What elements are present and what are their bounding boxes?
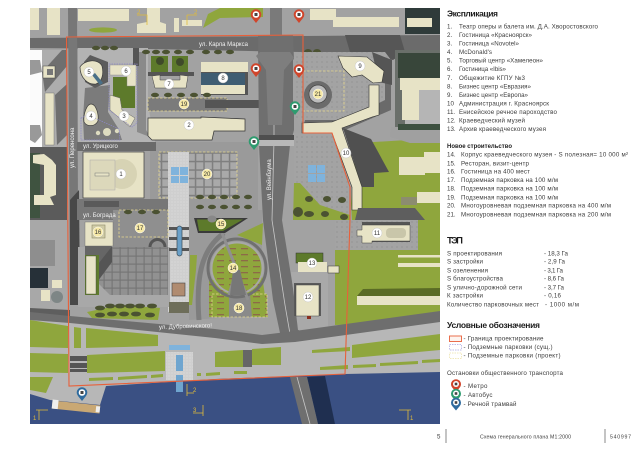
- number markers: 5: [87, 70, 91, 76]
- new construction list: 16.: [447, 169, 456, 176]
- indicator rows: - 0,16: [544, 293, 562, 300]
- number markers: 9: [358, 64, 362, 70]
- heading: symbols: Условные обозначения: [447, 320, 540, 330]
- buildings 6 and 3: [110, 65, 136, 127]
- section marks: 2: [137, 10, 141, 16]
- street labels: ул. Карла Маркса: [199, 42, 249, 48]
- number markers: 8: [221, 76, 225, 82]
- number markers: 16: [95, 230, 102, 236]
- pedestrian bridge: [259, 135, 296, 146]
- road centre lines: [272, 125, 290, 332]
- legend: explication: [447, 8, 599, 133]
- building 2: [148, 117, 245, 140]
- new construction list: Корпус краеведческого музея - S полезная= 10 000 м²: [461, 152, 628, 159]
- road Perensona: [68, 8, 78, 305]
- paved square south: [78, 247, 170, 307]
- building 4: [84, 104, 119, 136]
- new construction list: 18.: [447, 186, 456, 193]
- east gallery plaza: [293, 133, 352, 220]
- block 20 square: [158, 152, 238, 312]
- explication list: 10: [447, 100, 454, 107]
- explication list: 12.: [447, 117, 456, 124]
- SW block satellite: [30, 220, 70, 322]
- indicator rows: S проектирования: [447, 250, 502, 257]
- heading: public transport stops: Остановки общественного транспорта: [447, 370, 564, 377]
- shadow of building 10: [343, 128, 389, 187]
- indicator rows: - 18,3 Га: [544, 250, 569, 257]
- street labels: ул. Бограда: [83, 213, 116, 219]
- road Veinbauma: [258, 36, 299, 333]
- section marks: [33, 10, 414, 422]
- table: technical and economic indicators: [447, 236, 579, 308]
- number markers: 13: [309, 261, 316, 267]
- heading: explication: Экспликация: [447, 8, 498, 18]
- bus stop icons: [249, 101, 300, 150]
- number markers: 7: [167, 82, 171, 88]
- parking 17: [113, 210, 168, 247]
- new construction list: Подземная парковка на 100 м/м: [461, 177, 558, 184]
- new construction list: 17.: [447, 177, 456, 184]
- indicator rows: Количество парковочных мест: [447, 301, 539, 308]
- explication list: 9.: [447, 92, 452, 99]
- number markers: 15: [218, 222, 225, 228]
- new construction list: Ресторан, визит-центр: [461, 160, 530, 167]
- river tram stop icon: [77, 387, 87, 401]
- number markers: 18: [236, 306, 243, 312]
- rows of trees: [92, 46, 321, 214]
- section marks: 3: [193, 408, 197, 414]
- number markers: 3: [122, 114, 126, 120]
- explication list: Театр оперы и балета им. Д.А. Хворостовского: [459, 24, 599, 31]
- symbol: design boundary: - Граница проектирование: [464, 336, 544, 342]
- road Karl Marx: [30, 35, 440, 52]
- street labels: [70, 42, 273, 331]
- street labels: ул. Урицкого: [83, 144, 118, 150]
- lawn buildings east: [357, 255, 440, 305]
- boundary of design area: [66, 35, 350, 386]
- explication list: Гостиница «Ibis»: [459, 66, 507, 73]
- new construction list: Многоуровневая подземная парковка на 200 м/м: [461, 212, 611, 219]
- parking 21: [303, 71, 344, 111]
- explication list: Бизнес центр «Евразия»: [459, 83, 532, 90]
- legend: new construction: [447, 144, 628, 219]
- indicator rows: - 3,7 Га: [544, 284, 565, 291]
- indicator rows: - 1000 м/м: [545, 301, 579, 308]
- explication list: 4.: [447, 49, 452, 56]
- legend: symbols: [447, 320, 564, 410]
- river steps and pools: [166, 345, 193, 380]
- street labels: ул. Дубровинского!: [159, 323, 212, 331]
- east quarter buildings: [355, 152, 440, 220]
- indicator rows: К застройки: [447, 293, 484, 300]
- indicator rows: S застройки: [447, 259, 484, 266]
- pier pool: [176, 375, 183, 392]
- parking outline 6-3: [109, 64, 137, 127]
- section marks: 1: [33, 416, 37, 422]
- site plan map: [30, 8, 440, 424]
- number markers: 10: [343, 151, 350, 157]
- new construction list: Многоуровневая подземная парковка на 400 м/м: [461, 203, 611, 210]
- explication list: [447, 24, 599, 133]
- footer: [437, 429, 631, 443]
- number markers: 1: [119, 172, 123, 178]
- explication list: Енисейское речное пароходство: [459, 109, 558, 116]
- new construction list: 15.: [447, 160, 456, 167]
- new construction list: 21.: [447, 212, 456, 219]
- section marks: 2: [193, 388, 197, 394]
- road shadow: [70, 190, 80, 305]
- explication list: 13.: [447, 126, 456, 133]
- river: [30, 372, 440, 424]
- symbol: bus: - Автобус: [464, 392, 492, 399]
- building 8: [201, 62, 248, 95]
- building 13: [296, 253, 339, 273]
- street labels: ул. Перенсона: [70, 127, 76, 168]
- dark road shadow: [345, 35, 405, 60]
- indicator rows: - 2,9 Га: [544, 259, 566, 266]
- NE block: [390, 50, 440, 143]
- indicator rows: S благоустройства: [447, 276, 504, 283]
- explication list: Краеведческий музей: [459, 117, 526, 124]
- explication list: Бизнес центр «Европа»: [459, 92, 529, 99]
- number markers: 17: [137, 226, 144, 232]
- ship: [52, 400, 100, 413]
- explication list: 7.: [447, 75, 452, 82]
- symbol: river tram: - Речной трамвай: [464, 401, 517, 408]
- explication list: Гостиница «Novotel»: [459, 41, 520, 48]
- building 16: [85, 222, 113, 295]
- number markers: 21: [315, 92, 322, 98]
- bridge shadow on water: [307, 376, 335, 424]
- number markers: 20: [204, 172, 211, 178]
- parking ring 14: [198, 233, 266, 320]
- new construction list: [447, 152, 628, 219]
- symbol: metro: - Метро: [464, 383, 488, 390]
- indicator rows: - 3,1 Га: [544, 267, 564, 274]
- new construction list: 19.: [447, 194, 456, 201]
- underground parking outline NW: [81, 115, 120, 140]
- indicator rows: S улично-дорожной сети: [447, 284, 523, 291]
- explication list: 6.: [447, 66, 452, 73]
- number markers: 12: [305, 295, 312, 301]
- footer: Схема генерального плана М1:2000: [480, 434, 571, 440]
- number markers: [84, 61, 382, 313]
- number markers: 4: [89, 114, 93, 120]
- new construction list: 20.: [447, 203, 456, 210]
- explication list: 8.: [447, 83, 452, 90]
- indicator rows: - 8,6 Га: [544, 276, 565, 283]
- explication list: 5.: [447, 58, 452, 65]
- NW plaza: [78, 48, 155, 142]
- west side block: [30, 50, 67, 227]
- park around ring: [189, 223, 268, 317]
- number markers: 19: [181, 102, 188, 108]
- metro stop icons: [251, 9, 304, 78]
- central pedestrian axis details: [169, 226, 189, 313]
- indicator rows: S озеленения: [447, 267, 488, 274]
- bridge deck over river: [290, 377, 318, 424]
- footer: 540997: [610, 434, 631, 440]
- number markers: 14: [230, 266, 237, 272]
- street labels: ул. Вейнбаума: [266, 159, 273, 200]
- building 9: [338, 56, 384, 83]
- road Dubrovinskogo: [30, 311, 440, 344]
- building 10: [302, 85, 379, 210]
- indicator rows: [447, 250, 579, 308]
- building 15: [194, 216, 248, 233]
- east plaza: [293, 52, 392, 132]
- new construction list: Подземная парковка на 100 м/м: [461, 194, 558, 201]
- explication list: McDonald's: [459, 49, 492, 56]
- trees west of axis: [87, 304, 160, 320]
- explication list: 3.: [447, 41, 452, 48]
- building 11: [335, 220, 418, 250]
- new construction list: Подземная парковка на 100 м/м: [461, 186, 558, 193]
- white block left: [30, 50, 43, 147]
- new construction list: 14.: [447, 152, 456, 159]
- top strip buildings: [30, 8, 440, 35]
- ground: [30, 8, 440, 424]
- explication list: 11.: [447, 109, 455, 116]
- explication list: Администрация г. Красноярск: [459, 100, 549, 107]
- embankment lawns: [30, 320, 440, 393]
- explication list: 1.: [447, 24, 452, 31]
- number markers: 2: [187, 123, 191, 129]
- road Bograda: [77, 199, 168, 220]
- building 7: [148, 56, 194, 88]
- parking 18: [212, 294, 267, 317]
- crossings: [70, 350, 252, 372]
- building 1 opera: [83, 152, 144, 198]
- road junction: [256, 52, 294, 125]
- explication list: 2.: [447, 32, 452, 39]
- explication list: Торговый центр «Хамелеон»: [459, 58, 544, 65]
- museum grounds: [291, 272, 328, 330]
- parking 19: [148, 98, 260, 111]
- number markers: 11: [374, 231, 381, 237]
- road Uritskogo: [77, 142, 156, 151]
- explication list: Гостиница «Красноярск»: [459, 32, 533, 39]
- section marks: 2: [194, 10, 198, 16]
- embankment: [30, 318, 440, 405]
- building 5: [80, 61, 103, 85]
- explication list: Архив краеведческого музея: [459, 126, 546, 133]
- footer: 5: [437, 434, 441, 440]
- number markers: 6: [124, 69, 128, 75]
- symbol: existing underground parking: - Подземные парковки (сущ.): [464, 344, 552, 351]
- symbol: planned underground parking: - Подземные парковки (проект): [464, 353, 560, 360]
- heading: new construction: Новое строительство: [447, 144, 512, 150]
- section marks: 1: [410, 416, 414, 422]
- explication list: Общежитие КГПУ №3: [459, 75, 526, 82]
- building 12: [294, 283, 321, 319]
- green quarter east: [335, 138, 440, 325]
- new construction list: Гостиница на 400 мест: [461, 169, 530, 176]
- heading: indicators: ТЭП: [447, 236, 463, 246]
